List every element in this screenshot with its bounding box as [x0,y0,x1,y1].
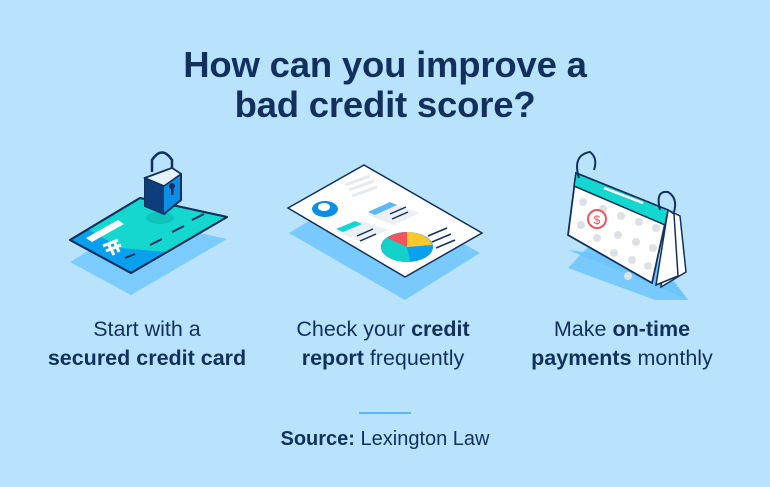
label: credit report: Check your credit [296,317,470,341]
title: bad credit score? [235,84,535,125]
title [183,44,588,125]
icon: credit report [288,165,482,300]
label: payments [531,317,713,370]
icon: calendar [568,152,688,300]
label: payments: payments monthly [531,346,713,370]
label: credit report [296,317,470,370]
icon: calendar: $ [594,213,601,227]
label: credit report: report frequently [302,346,464,370]
icons [68,151,688,300]
label: payments: Make on-time [554,317,690,341]
icon: secured credit card [70,152,227,295]
label: secured card [48,317,246,370]
title: How can you improve a [183,44,587,85]
source: Source: Lexington Law [280,428,490,450]
label: secured card: secured credit card [48,346,246,370]
icon: padlock [145,152,181,214]
label: secured card: Start with a [93,317,201,341]
